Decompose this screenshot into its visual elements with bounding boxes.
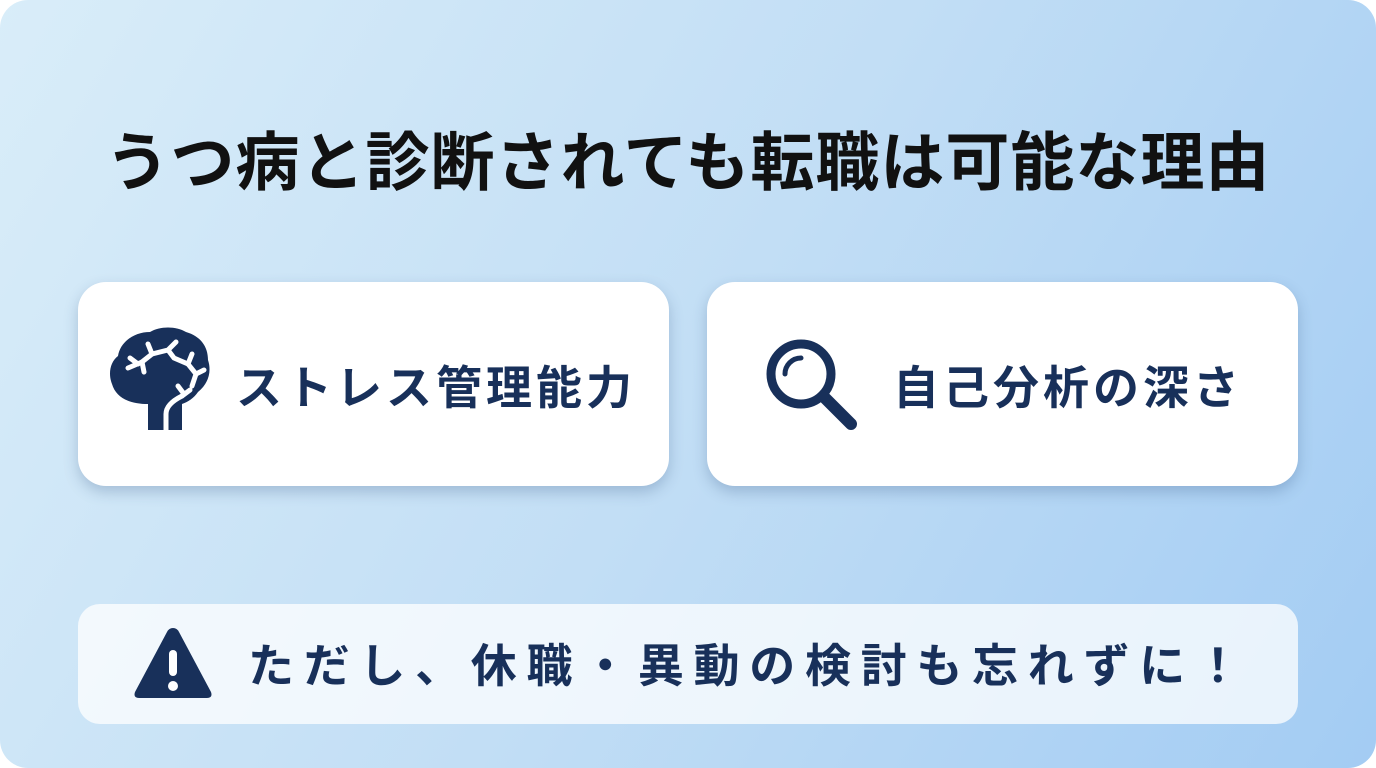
text: 自己分析の深さ [893,362,1243,414]
panel: self analysis [707,282,1298,486]
panel: stress management [78,282,669,486]
callout: warning note [78,604,1298,724]
icon: magnifier [766,340,857,430]
icon: brain [110,328,210,430]
text: ただし、休職・異動の検討も忘れずに！ [248,640,1251,692]
icon: warning [134,628,212,698]
title: うつ病と診断されても転職は可能な理由 [106,127,1270,199]
text: ストレス管理能力 [236,362,636,414]
